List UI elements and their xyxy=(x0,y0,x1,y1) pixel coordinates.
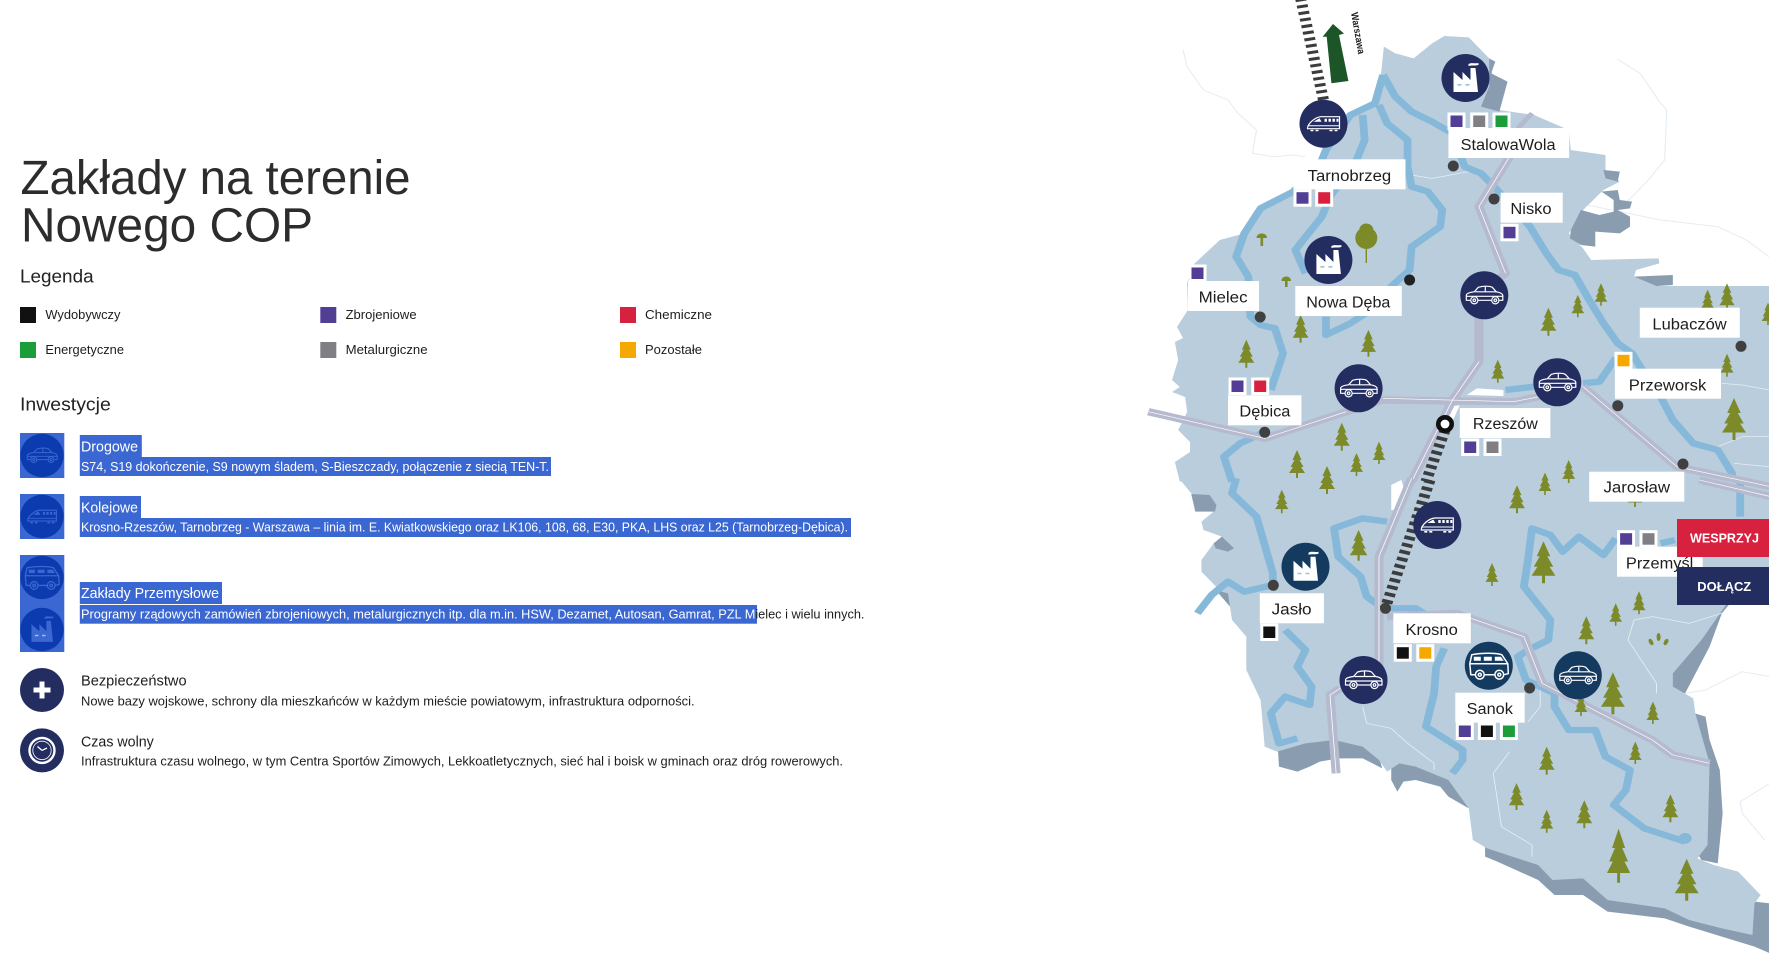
text: Infrastruktura czasu wolnego, w tym Centra Sportów Zimowych, Lekkoatletycznych, sieć hal i boisk w gminach oraz dróg rowerowych. xyxy=(81,754,843,769)
investment: Czas wolny xyxy=(20,728,843,772)
highlighted text: Programy rządowych zamówień zbrojeniowych, metalurgicznych itp. dla m.in. HSW, Dezamet, Autosan, Gamrat, PZL Mielec i wielu innych. xyxy=(81,607,864,622)
label: Jarosław xyxy=(1589,472,1684,502)
icon: factory Jasło xyxy=(1282,543,1330,591)
icon: car Sanok xyxy=(1554,651,1602,699)
legend xyxy=(20,307,712,358)
icon: clock xyxy=(20,728,64,772)
investment: Zakłady Przemysłowe xyxy=(20,555,864,652)
title: Zakłady na terenie xyxy=(20,152,410,205)
label: Tarnobrzeg: Tarnobrzeg xyxy=(1308,168,1391,185)
legend item: Energetyczne: Energetyczne xyxy=(45,342,124,357)
city labels xyxy=(1188,128,1740,723)
legend item: Pozostałe: Pozostałe xyxy=(645,342,702,357)
squares: Sanok xyxy=(1457,724,1516,738)
grey patches xyxy=(1191,58,1673,607)
legend heading: Legenda xyxy=(20,267,95,287)
squares: Jasło xyxy=(1262,625,1277,640)
label: Lubaczów xyxy=(1640,308,1740,338)
highlighted text xyxy=(80,582,865,624)
icon: car selected xyxy=(20,433,64,478)
investment: Drogowe xyxy=(20,433,551,478)
highlighted text: Zakłady Przemysłowe xyxy=(81,585,219,602)
legend item: Chemiczne: Chemiczne xyxy=(645,307,712,322)
highlighted text: S74, S19 dokończenie, S9 nowym śladem, S-Bieszczady, połączenie z siecią TEN-T. xyxy=(81,459,549,474)
squares: Krosno xyxy=(1395,646,1433,660)
button: WESPRZYJ: WESPRZYJ xyxy=(1690,531,1759,546)
rivers xyxy=(1197,75,1740,844)
text xyxy=(81,673,695,709)
label: Mielec xyxy=(1188,281,1259,311)
investment icons on map xyxy=(1282,54,1602,704)
legend item: Wydobywczy xyxy=(20,307,121,323)
icon: car Krosno xyxy=(1340,656,1388,704)
highlighted text: Krosno-Rzeszów, Tarnobrzeg - Warszawa – linia im. E. Kwiatkowskiego oraz LK106, 108, 68, E30, PKA, LHS oraz L25 (Tarnobrzeg-Dębica). xyxy=(81,520,848,535)
label: Lubaczów: Lubaczów xyxy=(1652,316,1728,333)
squares: Dębica xyxy=(1230,379,1268,394)
button: DOŁĄCZ xyxy=(1677,567,1769,605)
marker: Rzeszów xyxy=(1436,415,1454,433)
text: Czas wolny xyxy=(81,734,154,751)
city dots xyxy=(1255,160,1746,694)
trees xyxy=(1238,283,1769,901)
label: Przemyśl xyxy=(1617,547,1703,577)
icon: car Rzeszów xyxy=(1533,358,1581,406)
label: Stalowa Wola xyxy=(1448,128,1569,158)
highlighted text: Drogowe xyxy=(81,439,138,456)
investment: Bezpieczeństwo xyxy=(20,668,695,712)
button: DOŁĄCZ: DOŁĄCZ xyxy=(1697,579,1751,594)
label: Jarosław: Jarosław xyxy=(1604,480,1671,497)
title xyxy=(20,152,410,253)
label: Nisko xyxy=(1501,193,1563,223)
industry squares xyxy=(1190,114,1656,738)
leaves xyxy=(1648,633,1669,646)
legend item: Wydobywczy: Wydobywczy xyxy=(45,307,121,322)
label: Krosno xyxy=(1393,613,1471,643)
icon: train Tarnobrzeg xyxy=(1300,100,1348,148)
icon: van and factory selected xyxy=(20,555,64,652)
icon: factory Stalowa Wola xyxy=(1442,54,1490,102)
legend item: Chemiczne xyxy=(620,307,712,323)
icon: train selected xyxy=(20,494,64,539)
label: Dębica: Dębica xyxy=(1239,404,1291,421)
roads xyxy=(1148,113,1769,773)
investments heading: Inwestycje xyxy=(20,395,111,415)
legend item: Metalurgiczne: Metalurgiczne xyxy=(346,342,428,357)
land xyxy=(1172,36,1769,935)
label: Rzeszów: Rzeszów xyxy=(1473,416,1539,433)
highlighted text xyxy=(80,435,551,476)
label: Jasło xyxy=(1260,593,1324,623)
label: Jasło: Jasło xyxy=(1272,602,1312,619)
title: Nowego COP xyxy=(21,200,313,253)
button: WESPRZYJ xyxy=(1677,519,1769,557)
mushrooms xyxy=(1256,234,1291,287)
icon: factory Nowa Dęba xyxy=(1304,236,1352,284)
icon: plus xyxy=(20,668,64,712)
label: Krosno: Krosno xyxy=(1406,622,1458,639)
arrow xyxy=(1323,24,1348,83)
map xyxy=(1148,0,1769,953)
legend item: Zbrojeniowe xyxy=(320,307,417,323)
investment: Kolejowe xyxy=(20,494,851,539)
legend item: Zbrojeniowe: Zbrojeniowe xyxy=(346,307,417,322)
deciduous tree xyxy=(1355,224,1377,263)
label: Nowa Dęba xyxy=(1295,286,1402,316)
mountains and grey relief xyxy=(1278,603,1769,953)
icon: train Krosno-Rzeszów xyxy=(1413,501,1461,549)
text: Bezpieczeństwo xyxy=(81,673,187,690)
label: Stalowa Wola: StalowaWola xyxy=(1461,137,1556,154)
label: Przeworsk xyxy=(1615,369,1721,399)
squares: Rzeszów xyxy=(1463,440,1500,454)
railways xyxy=(1301,0,1445,608)
squares: Przeworsk xyxy=(1616,353,1631,368)
squares: Mielec xyxy=(1190,266,1205,280)
label: Sanok xyxy=(1455,693,1525,723)
icon: car north xyxy=(1460,271,1508,319)
label: Sanok: Sanok xyxy=(1467,701,1513,718)
squares: Tarnobrzeg xyxy=(1295,191,1332,205)
outer faint rivers xyxy=(1183,50,1769,840)
label: Nowa Dęba: Nowa Dęba xyxy=(1306,294,1391,311)
squares: Przemyśl xyxy=(1619,532,1656,546)
label: Przemyśl: Przemyśl xyxy=(1626,555,1693,572)
label: Nisko: Nisko xyxy=(1510,201,1552,218)
highlighted text xyxy=(80,496,851,537)
label: Przeworsk: Przeworsk xyxy=(1629,377,1707,394)
legend item: Pozostałe xyxy=(620,342,702,358)
text xyxy=(81,734,843,769)
icon: car Dębica xyxy=(1335,364,1383,412)
squares: Nisko xyxy=(1502,225,1517,240)
text: Nowe bazy wojskowe, schrony dla mieszkańców w każdym mieście powiatowym, infrastruktura odporności. xyxy=(81,694,695,709)
squares: Stalowa Wola xyxy=(1449,114,1509,128)
white lines on land xyxy=(1363,172,1769,857)
highlighted text: Kolejowe xyxy=(81,500,138,517)
icon: van Sanok xyxy=(1465,642,1513,690)
arrow to Warszawa xyxy=(1323,12,1366,83)
label: Rzeszów xyxy=(1460,408,1550,438)
Warszawa label: Warszawa xyxy=(1348,12,1366,55)
label: Mielec: Mielec xyxy=(1199,290,1248,307)
label: Tarnobrzeg xyxy=(1293,159,1406,189)
label: Dębica xyxy=(1228,395,1301,425)
